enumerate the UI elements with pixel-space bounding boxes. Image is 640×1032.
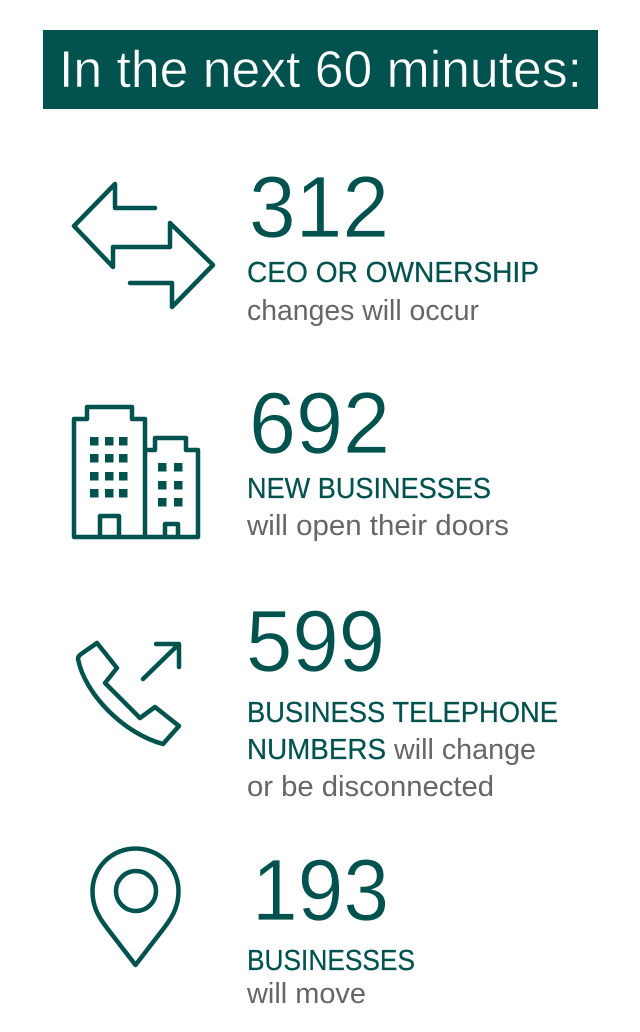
icon: phone with outgoing arrow (78, 643, 179, 744)
panel: business telephone numbers (78, 593, 558, 803)
text: will move: will move (246, 978, 366, 1010)
label: business telephone: BUSINESS TELEPHONE (247, 697, 558, 729)
number: 692: 692 (249, 375, 390, 472)
number: 312: 312 (249, 159, 389, 256)
title banner: In the next 60 minutes: (59, 41, 582, 99)
icon: office buildings (74, 407, 198, 537)
panel: CEO or ownership changes (74, 159, 539, 327)
label: businesses: BUSINESSES (247, 945, 415, 977)
text: or be disconnected: or be disconnected (247, 771, 494, 803)
text: will open their doors: will open their doors (246, 510, 509, 542)
text: changes will occur: changes will occur (247, 295, 479, 327)
number: 599: 599 (246, 593, 385, 690)
label: CEO or ownership: CEO OR OWNERSHIP (247, 257, 539, 289)
label: new businesses: NEW BUSINESSES (247, 473, 491, 505)
title banner (43, 30, 598, 109)
icon: swapping arrows (74, 184, 213, 307)
text: will change: will change (393, 734, 536, 766)
panel: businesses moving (92, 842, 415, 1010)
icon: location pin (92, 849, 178, 965)
panel: new businesses (74, 375, 509, 542)
number: 193: 193 (252, 842, 389, 939)
label: numbers: NUMBERS (247, 734, 386, 766)
